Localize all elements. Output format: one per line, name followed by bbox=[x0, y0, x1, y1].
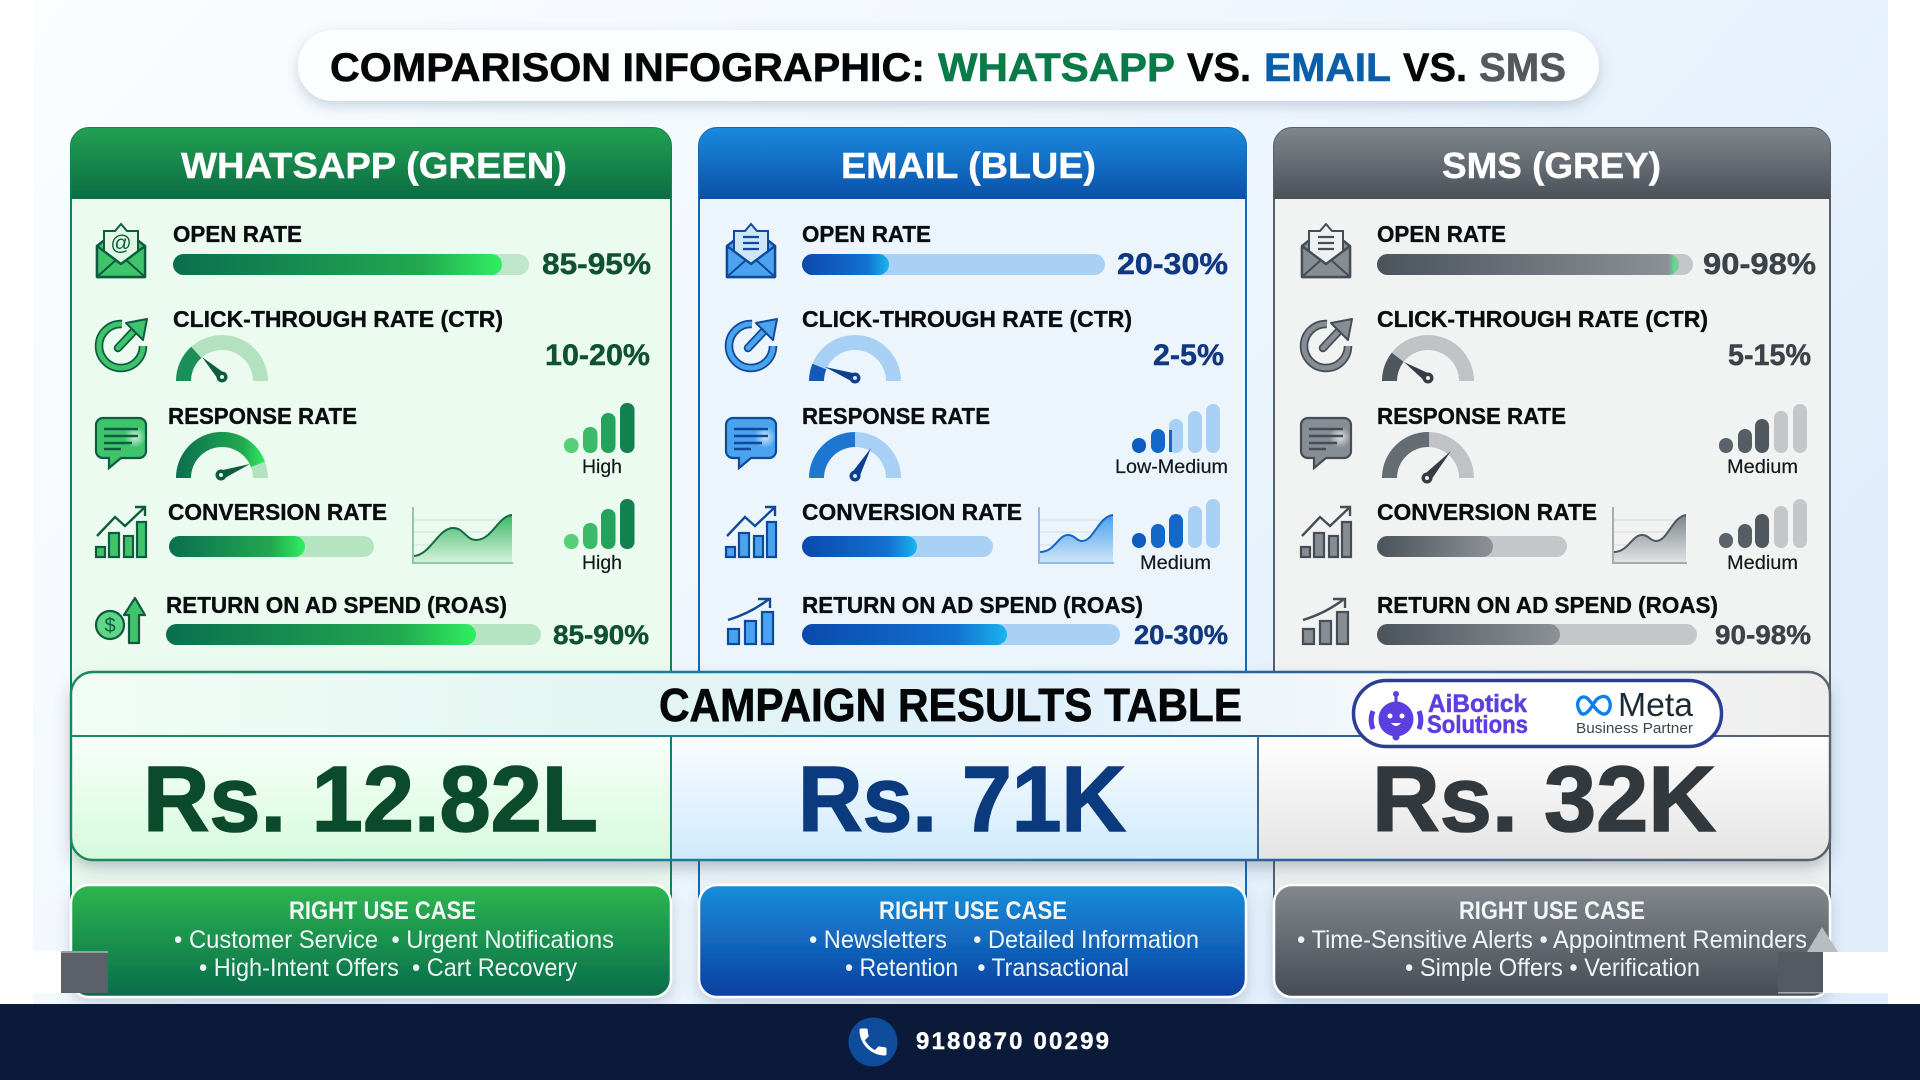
return on ad spend: RETURN ON AD SPEND (ROAS) bbox=[166, 592, 507, 618]
icon: click-through bbox=[729, 319, 777, 368]
response rate: High bbox=[582, 457, 622, 478]
logo badge bbox=[1354, 680, 1722, 746]
response rate: Medium bbox=[1727, 457, 1798, 478]
click-through rate bbox=[1377, 306, 1811, 384]
open rate: 20-30% bbox=[1117, 248, 1228, 281]
conversion rate: CONVERSION RATE bbox=[802, 499, 1022, 525]
click-through rate: CLICK-THROUGH RATE (CTR) bbox=[1377, 306, 1708, 332]
response rate: RESPONSE RATE bbox=[1377, 403, 1566, 429]
email result: Rs. 71K bbox=[798, 747, 1126, 851]
return on ad spend bbox=[1377, 592, 1811, 650]
callout: sms use case: • Simple Offers • Verification bbox=[1405, 954, 1700, 982]
click-through rate: 10-20% bbox=[545, 339, 650, 372]
email header: EMAIL (BLUE) bbox=[841, 145, 1096, 186]
icon: roas chart bbox=[1303, 599, 1348, 644]
return on ad spend: 90-98% bbox=[1715, 620, 1811, 650]
panel: email bbox=[699, 128, 1246, 900]
title: EMAIL bbox=[1264, 46, 1391, 90]
icon: robot bbox=[1371, 691, 1421, 740]
open rate bbox=[802, 221, 1228, 281]
footer bar bbox=[0, 1004, 1920, 1080]
open rate: OPEN RATE bbox=[173, 221, 302, 247]
title: VS. bbox=[1403, 46, 1467, 90]
whatsapp panel body bbox=[71, 128, 671, 900]
icon: roas chart bbox=[728, 599, 773, 644]
return on ad spend bbox=[802, 592, 1228, 650]
icon: click-through bbox=[99, 319, 147, 368]
email header bbox=[699, 128, 1246, 199]
conversion rate: Medium bbox=[1727, 553, 1798, 574]
logo badge: Solutions bbox=[1427, 711, 1528, 739]
signal bars bbox=[564, 499, 634, 549]
whatsapp result: Rs. 12.82L bbox=[143, 747, 598, 851]
callout: sms use case bbox=[1274, 885, 1830, 997]
signal bars bbox=[564, 403, 634, 453]
icon: meta infinity bbox=[1578, 696, 1610, 714]
sms header bbox=[1274, 128, 1830, 199]
return on ad spend: 20-30% bbox=[1134, 620, 1228, 650]
response rate: RESPONSE RATE bbox=[168, 403, 357, 429]
click-through rate: CLICK-THROUGH RATE (CTR) bbox=[173, 306, 503, 332]
icon: dollar arrow bbox=[96, 598, 145, 643]
signal bars bbox=[1719, 499, 1807, 548]
icon: chat bbox=[1301, 418, 1351, 468]
title: COMPARISON INFOGRAPHIC: bbox=[330, 46, 925, 90]
title: WHATSAPP bbox=[938, 46, 1175, 90]
title: VS. bbox=[1187, 46, 1251, 90]
icon: chat bbox=[96, 418, 146, 468]
response rate bbox=[1377, 403, 1807, 484]
callout: sms use case: • Time-Sensitive Alerts • Appointment Reminders bbox=[1297, 926, 1807, 954]
open rate bbox=[173, 221, 651, 281]
left corner patch bbox=[33, 951, 108, 993]
whatsapp header: WHATSAPP (GREEN) bbox=[181, 145, 567, 186]
title: SMS bbox=[1479, 46, 1566, 90]
panel: whatsapp bbox=[71, 128, 671, 900]
icon: growth bbox=[726, 507, 776, 557]
click-through rate bbox=[802, 306, 1224, 384]
email panel body bbox=[699, 128, 1246, 900]
conversion rate bbox=[1377, 499, 1807, 574]
open rate: 90-98% bbox=[1703, 248, 1816, 281]
icon: growth bbox=[96, 507, 146, 557]
title bbox=[298, 30, 1599, 101]
open rate bbox=[1377, 221, 1816, 281]
icon: dollar arrow: $ bbox=[104, 615, 116, 637]
conversion rate bbox=[168, 499, 634, 574]
sms result: Rs. 32K bbox=[1372, 747, 1716, 851]
callout: whatsapp use case: • High-Intent Offers • Cart Recovery bbox=[199, 954, 577, 982]
icon: click-through bbox=[1304, 319, 1352, 368]
logo badge: Meta bbox=[1618, 686, 1694, 723]
open rate: OPEN RATE bbox=[1377, 221, 1506, 247]
icon: phone bbox=[848, 1018, 898, 1066]
return on ad spend: RETURN ON AD SPEND (ROAS) bbox=[1377, 592, 1718, 618]
response rate bbox=[802, 403, 1228, 482]
area chart bbox=[1613, 507, 1687, 563]
click-through rate: 2-5% bbox=[1153, 339, 1224, 372]
logo badge: Business Partner bbox=[1576, 720, 1693, 737]
callout: whatsapp use case: RIGHT USE CASE bbox=[289, 897, 476, 925]
area chart bbox=[1039, 507, 1114, 563]
return on ad spend: 85-90% bbox=[553, 620, 649, 650]
return on ad spend bbox=[166, 592, 649, 650]
open rate: 85-95% bbox=[542, 248, 651, 281]
signal bars bbox=[1132, 404, 1220, 453]
area chart bbox=[413, 507, 513, 563]
callout: email use case bbox=[699, 885, 1246, 997]
panel: campaign results table bbox=[71, 672, 1830, 860]
callout: whatsapp use case bbox=[71, 885, 671, 997]
sms panel body bbox=[1274, 128, 1830, 900]
table heading: CAMPAIGN RESULTS TABLE bbox=[659, 679, 1242, 731]
conversion rate: Medium bbox=[1140, 553, 1211, 574]
icon: growth bbox=[1301, 507, 1351, 557]
response rate: Low-Medium bbox=[1115, 457, 1228, 478]
icon: chat bbox=[726, 418, 776, 468]
callout: email use case: • Retention • Transactional bbox=[845, 954, 1129, 982]
click-through rate: 5-15% bbox=[1728, 339, 1811, 372]
whatsapp header bbox=[71, 128, 671, 199]
icon: envelope bbox=[727, 224, 775, 277]
return on ad spend: RETURN ON AD SPEND (ROAS) bbox=[802, 592, 1143, 618]
phone number: 9180870 00299 bbox=[916, 1028, 1109, 1055]
callout: email use case: RIGHT USE CASE bbox=[879, 897, 1067, 925]
callout: sms use case: RIGHT USE CASE bbox=[1459, 897, 1645, 925]
right corner patch bbox=[1778, 927, 1888, 994]
conversion rate: High bbox=[582, 553, 622, 574]
signal bars bbox=[1132, 499, 1220, 548]
icon: envelope bbox=[97, 224, 145, 277]
conversion rate: CONVERSION RATE bbox=[168, 499, 387, 525]
signal bars bbox=[1719, 404, 1807, 453]
sms header: SMS (GREY) bbox=[1442, 145, 1661, 186]
icon: envelope: @ bbox=[110, 232, 132, 255]
panel: sms bbox=[1274, 128, 1830, 900]
response rate: RESPONSE RATE bbox=[802, 403, 990, 429]
conversion rate bbox=[802, 499, 1220, 574]
response rate bbox=[168, 403, 634, 480]
conversion rate: CONVERSION RATE bbox=[1377, 499, 1597, 525]
click-through rate: CLICK-THROUGH RATE (CTR) bbox=[802, 306, 1132, 332]
callout: email use case: • Newsletters • Detailed Information bbox=[809, 926, 1199, 954]
icon: envelope bbox=[1302, 224, 1350, 277]
open rate: OPEN RATE bbox=[802, 221, 931, 247]
logo badge: AiBotick bbox=[1428, 690, 1527, 718]
click-through rate bbox=[173, 306, 650, 382]
callout: whatsapp use case: • Customer Service • Urgent Notifications bbox=[174, 926, 614, 954]
